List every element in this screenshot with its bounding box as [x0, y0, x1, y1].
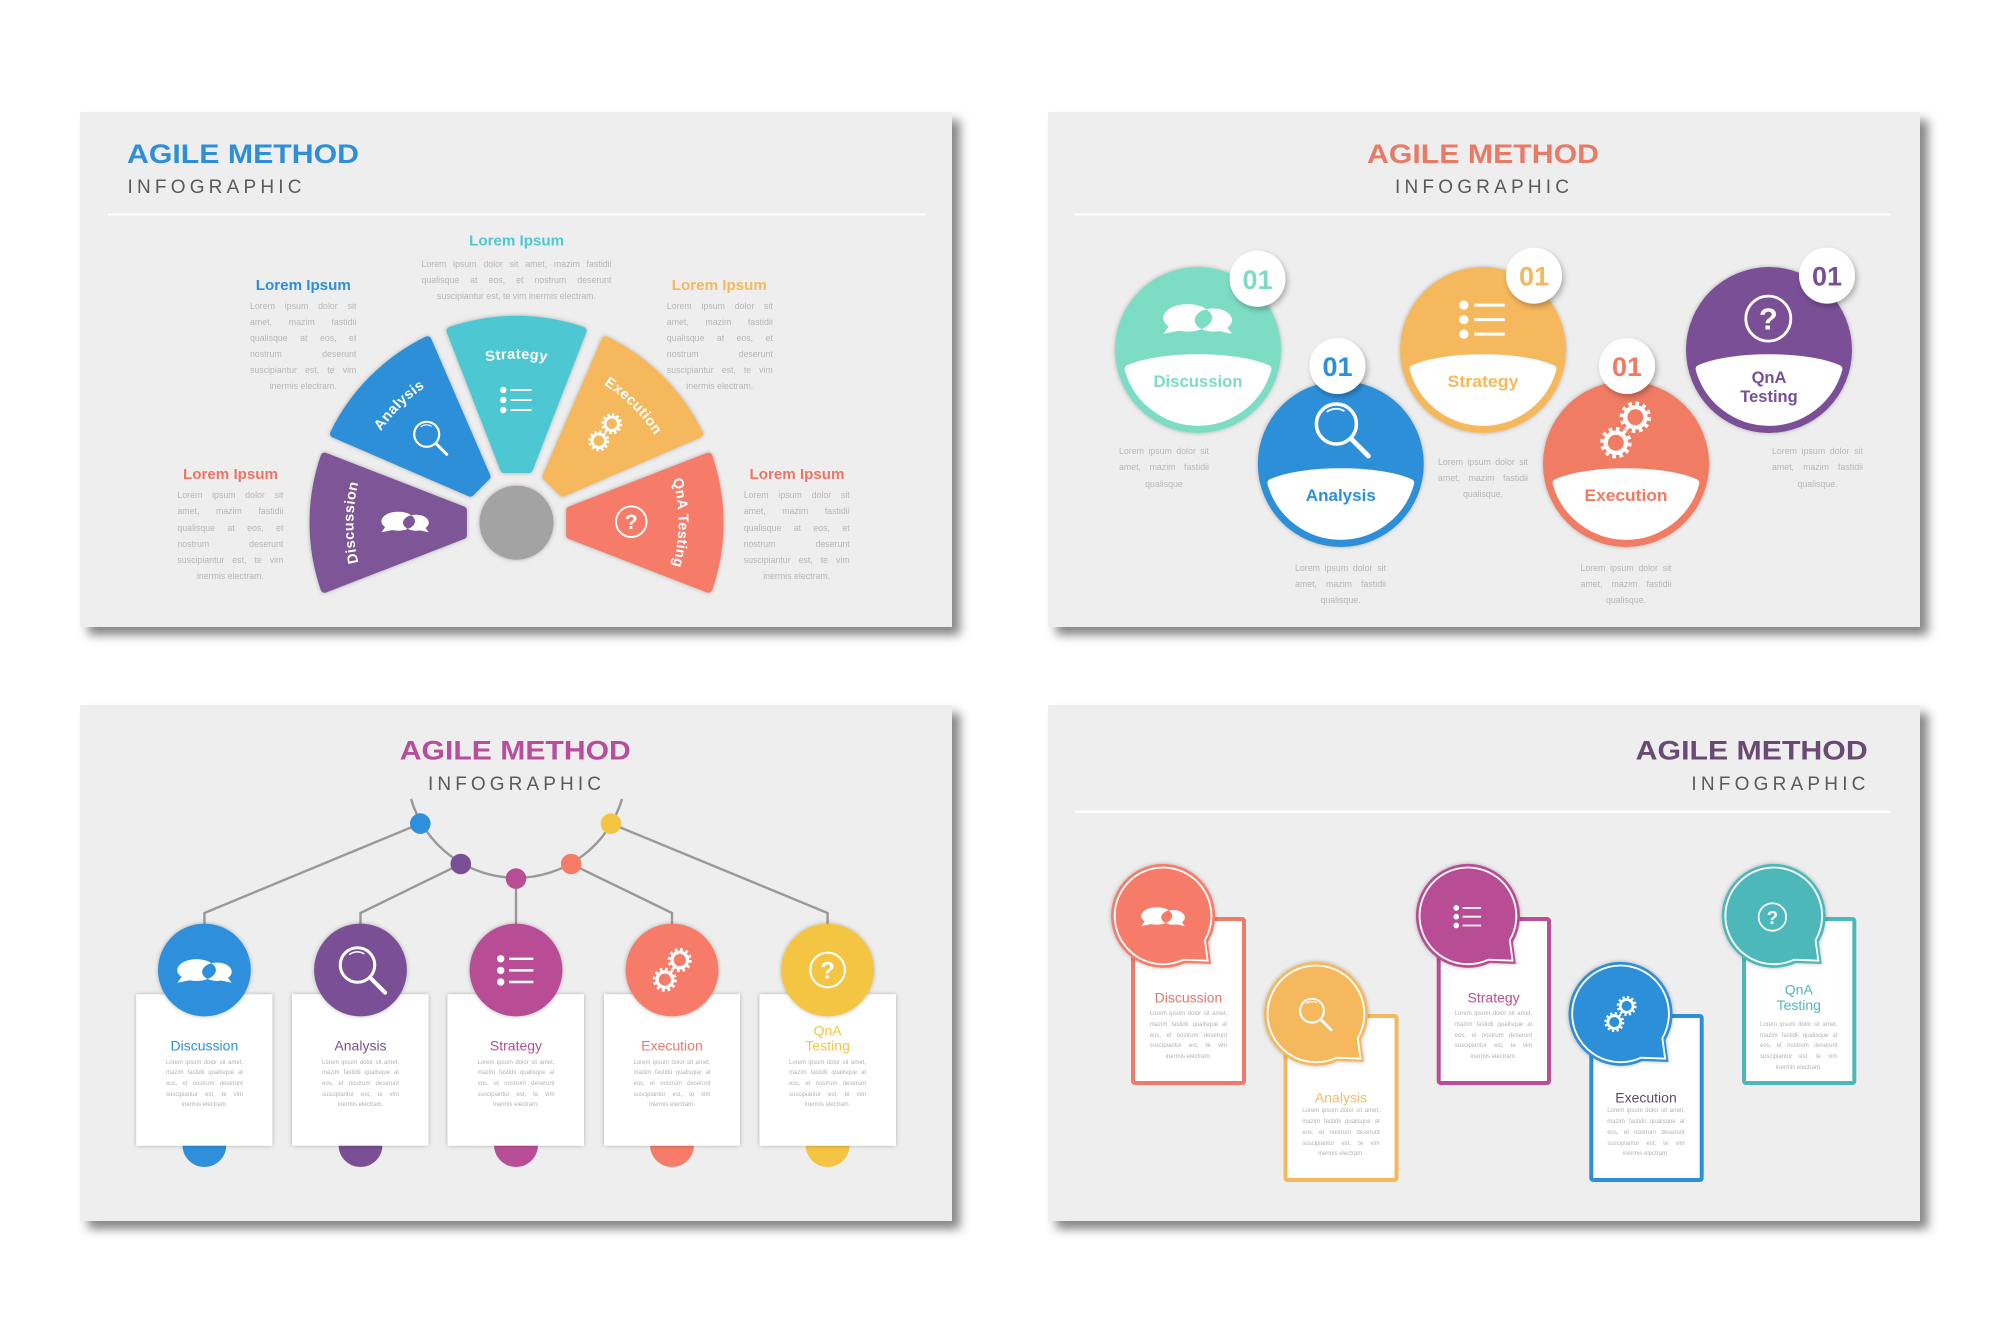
bubble card: discussion	[1111, 864, 1244, 1083]
bubble card: discussion: suscipiantur est, te vim	[1150, 1043, 1227, 1049]
bubble card: analysis: suscipiantur est, te vim	[1302, 1140, 1380, 1146]
text block: strategy	[422, 234, 612, 306]
text block: qna testing: suscipiantur est, te vim	[744, 555, 850, 565]
fan segment: execution: Execution	[604, 376, 660, 434]
text block: strategy: Lorem ipsum dolor sit amet, mazim fastidii	[422, 259, 612, 269]
card: strategy: Strategy	[490, 1038, 542, 1054]
panel: fan diagram	[80, 112, 967, 642]
text block: execution: Lorem ipsum dolor sit	[1580, 563, 1672, 573]
card: qna testing: Testing	[805, 1038, 850, 1054]
card: discussion: eos, et nostrum deserunt	[166, 1081, 243, 1087]
bubble card: execution: Execution	[1615, 1090, 1677, 1106]
card: analysis: Lorem ipsum dolor sit amet,	[322, 1060, 399, 1066]
text block: execution: suscipiantur est, te vim	[667, 365, 773, 375]
heading: agile method plum: AGILE METHOD	[1636, 736, 1868, 766]
panel: numbered circles	[1048, 112, 1928, 635]
text block: analysis: qualisque at eos, et	[250, 333, 356, 343]
bubble card: discussion: inermis electram.	[1166, 1054, 1211, 1060]
bubble card: qna testing: inermis electram.	[1776, 1065, 1822, 1071]
fan segment: strategy	[444, 314, 588, 476]
card: qna testing: inermis electram.	[805, 1102, 850, 1108]
card: qna testing	[760, 924, 896, 1167]
bubble card: qna testing: mazim fastidii qualisque at	[1760, 1033, 1838, 1039]
text block: qna testing: Lorem ipsum dolor sit	[1772, 446, 1863, 456]
circle: qna testing: 01	[1812, 262, 1842, 292]
fan segment: strategy: Strategy	[486, 349, 548, 364]
text block: analysis	[250, 278, 356, 396]
text block: qna testing: Lorem Ipsum	[750, 467, 844, 483]
card: analysis: eos, et nostrum deserunt	[322, 1081, 399, 1087]
card: strategy: mazim fastidii qualisque at	[478, 1070, 554, 1076]
text block: qna testing: amet, mazim fastidii	[744, 506, 850, 516]
subheading: INFOGRAPHIC	[1395, 177, 1569, 198]
text block: qna testing: qualisque.	[1797, 479, 1838, 489]
text block: execution: amet, mazim fastidii	[667, 317, 773, 327]
card: discussion: Discussion	[171, 1038, 238, 1054]
text block: discussion: Lorem ipsum dolor sit	[1119, 446, 1209, 456]
bubble card: execution: inermis electram.	[1623, 1151, 1669, 1157]
card: qna testing: Lorem ipsum dolor sit amet,	[789, 1060, 866, 1066]
text block: discussion: qualisque	[1145, 479, 1183, 489]
text block: discussion: Lorem ipsum dolor sit	[177, 490, 283, 500]
card: strategy: Lorem ipsum dolor sit amet,	[478, 1060, 554, 1066]
fan segment: qna testing	[564, 450, 726, 594]
text block: execution	[667, 278, 773, 396]
text block: execution: inermis electram.	[686, 381, 753, 391]
bubble card: qna testing: eos, et nostrum deserunt	[1760, 1043, 1838, 1049]
text block: strategy	[1438, 454, 1528, 504]
bubble card: qna testing	[1722, 864, 1854, 1083]
text block: qna testing: nostrum deserunt	[744, 539, 850, 549]
panel: branching cards	[80, 705, 960, 1229]
bubble card: analysis: Analysis	[1315, 1090, 1367, 1106]
card: discussion	[136, 924, 272, 1167]
text block: discussion	[1119, 443, 1209, 493]
bubble card: qna testing: QnA	[1785, 982, 1813, 998]
bubble card: qna testing: ?	[1767, 908, 1778, 929]
circle: qna testing: ?	[1759, 302, 1778, 337]
card: discussion: inermis electram.	[182, 1102, 227, 1108]
text block: analysis: inermis electram.	[270, 381, 337, 391]
circle: strategy: 01	[1519, 262, 1549, 292]
heading: agile method blue: AGILE METHOD	[127, 139, 359, 169]
text block: discussion: suscipiantur est, te vim	[177, 555, 283, 565]
text block: strategy: Lorem ipsum dolor sit	[1438, 457, 1528, 467]
bubble card: execution	[1569, 962, 1702, 1180]
text block: execution: qualisque.	[1606, 595, 1646, 605]
card: execution: Execution	[641, 1038, 703, 1054]
text block: strategy: suscipiantur est, te vim inermis electram.	[437, 291, 596, 301]
text block: qna testing: inermis electram.	[763, 571, 830, 581]
card: strategy	[448, 924, 584, 1167]
text block: discussion: amet, mazim fastidii	[177, 506, 283, 516]
card: analysis: Analysis	[334, 1038, 387, 1054]
bubble card: execution: Lorem ipsum dolor sit amet,	[1607, 1108, 1685, 1114]
text block: qna testing: qualisque at eos, et	[744, 523, 850, 533]
text block: execution: qualisque at eos, et	[667, 333, 773, 343]
bubble card: discussion: Lorem ipsum dolor sit amet,	[1150, 1011, 1227, 1017]
card: strategy: inermis electram.	[493, 1102, 539, 1108]
bubble card: strategy: suscipiantur est, te vim	[1455, 1043, 1532, 1049]
bubble card: qna testing: Lorem ipsum dolor sit amet,	[1760, 1022, 1838, 1028]
card: strategy: suscipiantur est, te vim	[478, 1092, 554, 1098]
card: execution: suscipiantur est, te vim	[634, 1092, 710, 1098]
text block: discussion: inermis electram.	[197, 571, 264, 581]
text block: strategy: qualisque.	[1463, 489, 1503, 499]
circle: execution: Execution	[1584, 487, 1668, 505]
node dots	[410, 813, 621, 889]
circle: analysis: Analysis	[1306, 487, 1376, 505]
card: strategy: eos, et nostrum deserunt	[478, 1081, 554, 1087]
bubble card: analysis	[1264, 962, 1396, 1180]
subheading: INFOGRAPHIC	[428, 774, 601, 795]
text block: analysis	[1295, 560, 1386, 610]
card: analysis	[292, 924, 428, 1167]
circle: discussion: Discussion	[1154, 373, 1242, 391]
bubble card: analysis: Lorem ipsum dolor sit amet,	[1302, 1108, 1380, 1114]
card: qna testing: eos, et nostrum deserunt	[789, 1081, 866, 1087]
circle: strategy	[1400, 248, 1566, 433]
bubble card: strategy	[1416, 864, 1549, 1083]
text block: analysis: Lorem Ipsum	[256, 278, 351, 294]
bubble card: discussion: eos, et nostrum deserunt	[1150, 1033, 1227, 1039]
text block: discussion: qualisque at eos, et	[177, 523, 283, 533]
bubble card: strategy: mazim fastidii qualisque at	[1455, 1022, 1532, 1028]
card: qna testing: QnA	[814, 1023, 842, 1039]
text block: analysis: Lorem ipsum dolor sit	[1295, 563, 1386, 573]
fan segment: discussion: Discussion	[344, 482, 358, 564]
text block: discussion: Lorem Ipsum	[183, 467, 278, 483]
card: analysis: inermis electram.	[338, 1102, 383, 1108]
card: discussion: suscipiantur est, te vim	[166, 1092, 243, 1098]
card: analysis: suscipiantur est, te vim	[322, 1092, 399, 1098]
circle: execution: 01	[1612, 352, 1642, 382]
bubble card: strategy: Strategy	[1468, 990, 1520, 1006]
card: execution: eos, et nostrum deserunt	[634, 1081, 710, 1087]
bubble card: strategy: eos, et nostrum deserunt	[1455, 1033, 1532, 1039]
text block: discussion: amet, mazim fastidii	[1119, 462, 1209, 472]
card: analysis: mazim fastidii qualisque at	[322, 1070, 399, 1076]
bubble card: strategy: Lorem ipsum dolor sit amet,	[1455, 1011, 1532, 1017]
bubble card: analysis: mazim fastidii qualisque at	[1302, 1119, 1380, 1125]
text block: strategy: amet, mazim fastidii	[1438, 473, 1528, 483]
text block: discussion	[177, 467, 283, 585]
text block: qna testing: Lorem ipsum dolor sit	[744, 490, 850, 500]
fan segment: qna testing: QnA Testing	[670, 478, 689, 567]
text block: analysis: suscipiantur est, te vim	[250, 365, 356, 375]
text block: analysis: nostrum deserunt	[250, 349, 356, 359]
card: qna testing: ?	[820, 958, 835, 984]
text block: execution	[1580, 560, 1672, 610]
text block: analysis: amet, mazim fastidii	[250, 317, 356, 327]
circle: execution	[1543, 338, 1709, 547]
text block: strategy: qualisque at eos, et nostrum deserunt	[422, 275, 612, 285]
text block: execution: amet, mazim fastidii	[1580, 579, 1672, 589]
bubble card: qna testing: suscipiantur est, te vim	[1760, 1054, 1838, 1060]
text block: execution: nostrum deserunt	[667, 349, 773, 359]
fan segment: analysis: Analysis	[375, 382, 424, 431]
text block: analysis: Lorem ipsum dolor sit	[250, 301, 356, 311]
subheading: INFOGRAPHIC	[1691, 774, 1865, 795]
text block: execution: Lorem ipsum dolor sit	[667, 301, 773, 311]
text block: qna testing	[744, 467, 850, 585]
text block: qna testing	[1772, 443, 1863, 493]
heading: agile method coral: AGILE METHOD	[1367, 139, 1599, 169]
fan segment: execution	[540, 334, 705, 498]
card: execution: Lorem ipsum dolor sit amet,	[634, 1060, 710, 1066]
fan segment: qna testing: ?	[625, 511, 638, 534]
panel: speech bubble cards	[1048, 705, 1928, 1229]
card: qna testing: suscipiantur est, te vim	[789, 1092, 866, 1098]
card: discussion: mazim fastidii qualisque at	[166, 1070, 243, 1076]
bubble card: discussion: mazim fastidii qualisque at	[1150, 1022, 1227, 1028]
text block: analysis: qualisque.	[1320, 595, 1361, 605]
connector tree	[204, 799, 828, 926]
text block: analysis: amet, mazim fastidii	[1295, 579, 1386, 589]
circle: qna testing: QnA	[1752, 369, 1786, 387]
card: execution	[604, 924, 740, 1167]
card: execution: mazim fastidii qualisque at	[634, 1070, 710, 1076]
bubble card: execution: eos, et nostrum deserunt	[1607, 1130, 1685, 1136]
circle: analysis	[1258, 338, 1424, 547]
card: execution: inermis electram.	[649, 1102, 695, 1108]
circle: qna testing	[1686, 248, 1855, 433]
text block: qna testing: amet, mazim fastidii	[1772, 462, 1863, 472]
text block: execution: Lorem Ipsum	[672, 278, 767, 294]
circle: strategy: Strategy	[1448, 373, 1519, 391]
card: qna testing: mazim fastidii qualisque at	[789, 1070, 866, 1076]
bubble card: analysis: eos, et nostrum deserunt	[1302, 1130, 1380, 1136]
bubble card: analysis: inermis electram.	[1318, 1151, 1364, 1157]
fan segment: analysis	[328, 334, 492, 498]
bubble card: execution: mazim fastidii qualisque at	[1607, 1119, 1685, 1125]
circle: qna testing: Testing	[1740, 388, 1798, 406]
subheading: INFOGRAPHIC	[128, 177, 302, 198]
text block: strategy: Lorem Ipsum	[469, 234, 564, 250]
fan hub circle	[480, 486, 554, 560]
bubble card: strategy: inermis electram.	[1471, 1054, 1516, 1060]
fan segment: discussion	[307, 450, 470, 594]
card: discussion: Lorem ipsum dolor sit amet,	[166, 1060, 243, 1066]
bubble card: discussion: Discussion	[1155, 990, 1222, 1006]
circle: discussion	[1115, 251, 1286, 433]
circle: discussion: 01	[1242, 265, 1273, 295]
text block: discussion: nostrum deserunt	[177, 539, 283, 549]
bubble card: execution: suscipiantur est, te vim	[1607, 1140, 1685, 1146]
bubble card: qna testing: Testing	[1777, 997, 1821, 1013]
circle: analysis: 01	[1322, 352, 1353, 382]
heading: agile method magenta: AGILE METHOD	[400, 736, 631, 766]
